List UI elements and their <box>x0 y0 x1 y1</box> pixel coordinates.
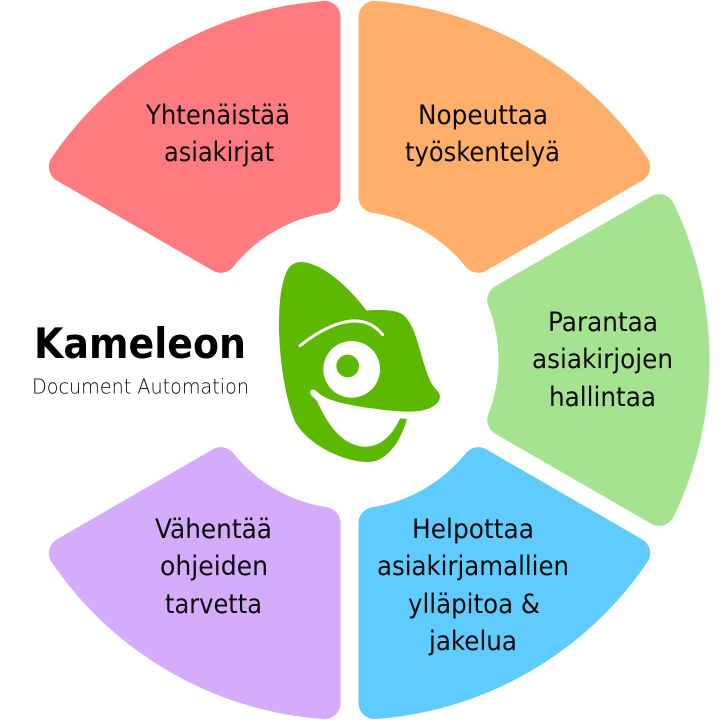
panel: Vähentää ohjeiden tarvetta: tarvetta <box>165 589 262 620</box>
title: Kameleon: Kameleon <box>34 319 246 368</box>
panel: Parantaa asiakirjojen hallintaa: hallintaa <box>549 382 656 413</box>
panel: Yhtenäistää asiakirjat: asiakirjat <box>164 137 274 168</box>
panel: Parantaa asiakirjojen hallintaa: Parantaa <box>548 307 658 338</box>
panel: Yhtenäistää asiakirjat: Yhtenäistää <box>145 100 290 131</box>
panel: Helpottaa asiakirjamallien ylläpitoa ja jakelua: ylläpitoa & <box>408 589 540 620</box>
panel: Nopeuttaa työskentelyä: Nopeuttaa <box>418 100 548 131</box>
panel: Helpottaa asiakirjamallien ylläpitoa ja jakelua: Helpottaa <box>412 514 534 545</box>
panel: Vähentää ohjeiden tarvetta: Vähentää <box>155 514 272 545</box>
panel: Nopeuttaa työskentelyä <box>275 0 673 324</box>
icon: Kameleon chameleon logo <box>279 262 440 462</box>
panel: Parantaa asiakirjojen hallintaa <box>487 194 709 526</box>
panel: Nopeuttaa työskentelyä: työskentelyä <box>405 137 560 168</box>
panel: Yhtenäistää asiakirjat <box>26 0 424 324</box>
panel: Helpottaa asiakirjamallien ylläpitoa ja jakelua <box>275 396 673 720</box>
subtitle: Document Automation: Document Automation <box>32 374 249 398</box>
panel: Vähentää ohjeiden tarvetta: ohjeiden <box>160 551 268 582</box>
panel: Vähentää ohjeiden tarvetta <box>26 396 424 720</box>
panel: Helpottaa asiakirjamallien ylläpitoa ja jakelua: asiakirjamallien <box>377 551 569 582</box>
panel: Parantaa asiakirjojen hallintaa: asiakirjojen <box>532 344 673 375</box>
panel: Helpottaa asiakirjamallien ylläpitoa ja jakelua: jakelua <box>428 626 517 657</box>
